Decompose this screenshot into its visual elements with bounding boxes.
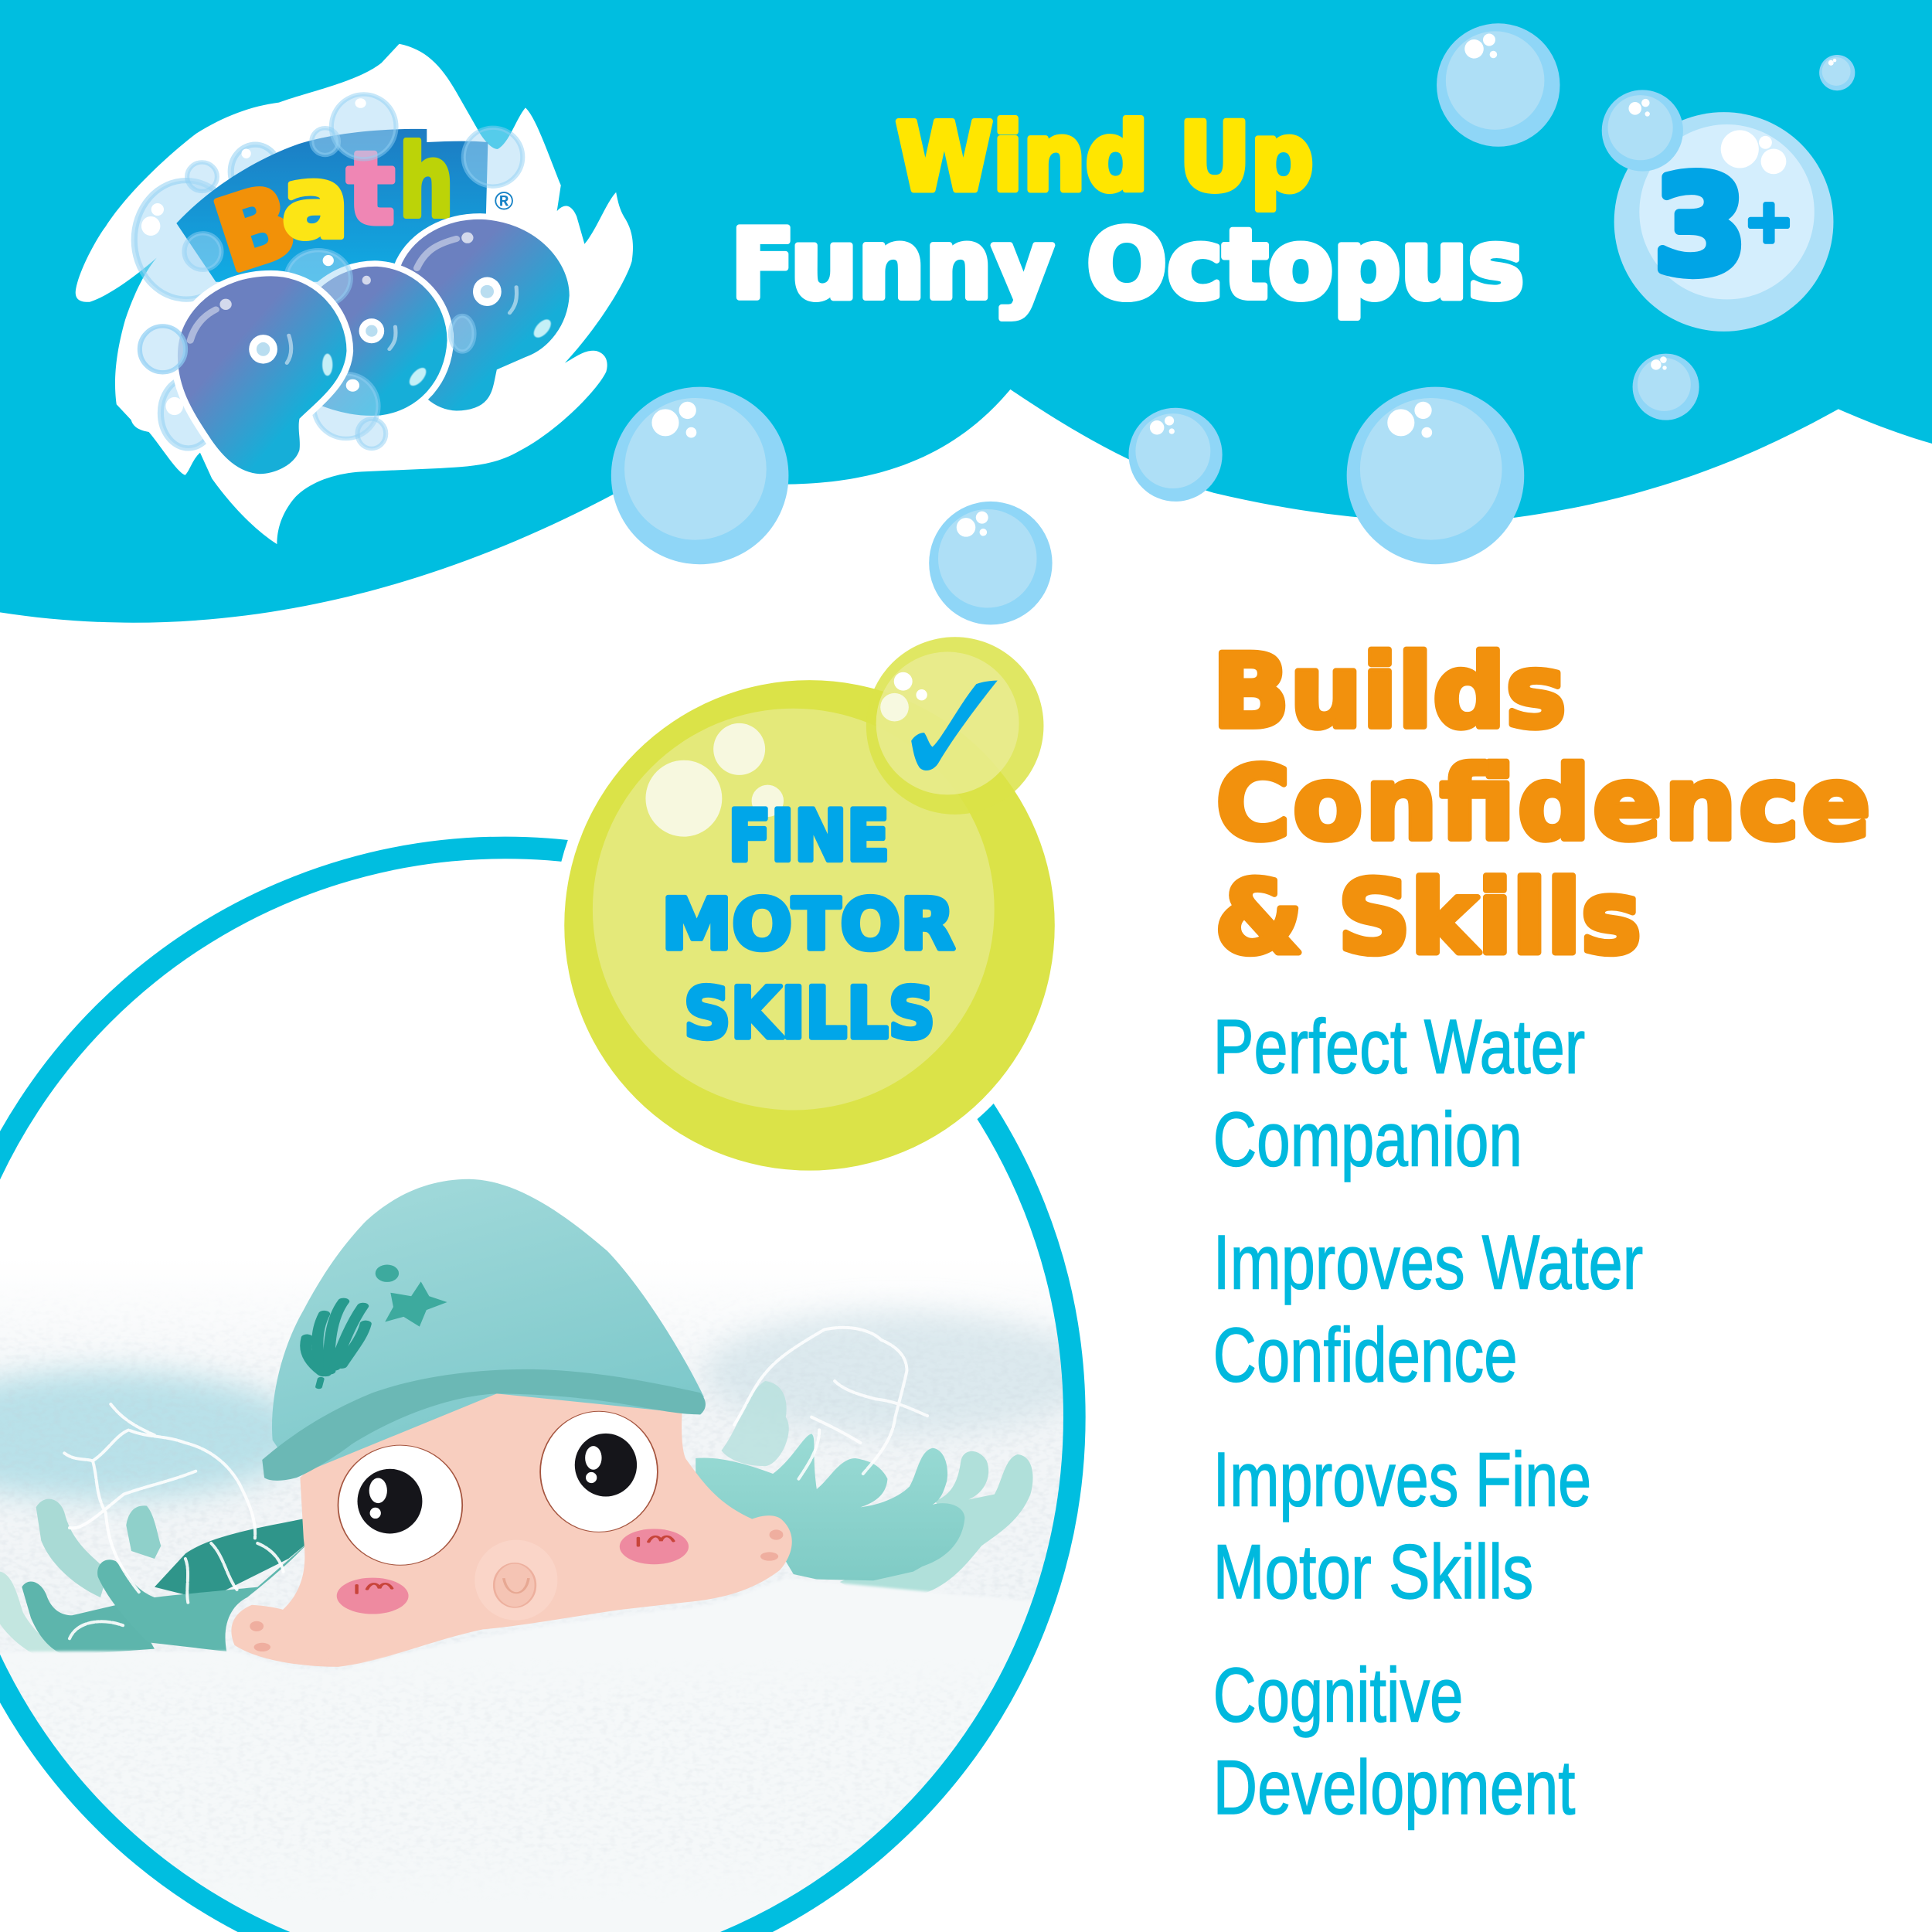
logo word Bath: h — [400, 125, 454, 240]
heading: builds confidence and skills: Builds — [1213, 633, 1566, 750]
soft bubbles in front of banner — [185, 94, 522, 448]
logo splash — [76, 44, 633, 544]
badge label: MOTOR — [662, 885, 955, 966]
fine motor skills badge — [564, 637, 1055, 1171]
badge bubble — [564, 680, 1055, 1171]
bubble — [929, 502, 1053, 624]
foam texture in foreground — [0, 1657, 1109, 1903]
bubble — [1437, 23, 1560, 147]
icon: star decal — [385, 1281, 447, 1327]
mouth — [474, 1540, 557, 1621]
age text: 3 — [1654, 148, 1747, 304]
cheeks — [337, 1529, 689, 1614]
bubble — [1819, 55, 1855, 90]
icon: shell decal — [306, 1301, 366, 1387]
logo banner — [176, 129, 488, 282]
logo word Bath: B — [202, 163, 309, 295]
badge label: SKILLS — [684, 973, 935, 1054]
badge highlights — [645, 723, 784, 837]
benefit: improves water confidence: Confidence — [1213, 1312, 1517, 1397]
benefit: cognitive development: Development — [1213, 1745, 1575, 1830]
logo word Bath: a — [282, 146, 349, 260]
title line two: Funny Octopus — [730, 209, 1524, 321]
body — [231, 1377, 792, 1667]
left tentacles — [0, 1404, 311, 1655]
soft bubbles behind banner — [134, 145, 280, 448]
octopus toy — [0, 1179, 1077, 1932]
right splash — [734, 1328, 927, 1479]
bubble — [1602, 90, 1683, 172]
age badge 3+ — [1614, 112, 1833, 332]
left splash — [64, 1404, 284, 1638]
benefit: perfect water companion: Perfect Water — [1213, 1005, 1585, 1090]
benefit: improves fine motor skills: Improves Fine — [1213, 1437, 1591, 1522]
shell helmet — [262, 1179, 706, 1481]
photo ring — [0, 848, 1074, 1932]
check bubble — [866, 637, 1043, 815]
heading: builds confidence and skills — [1213, 633, 1870, 976]
logo letter P front — [175, 274, 350, 477]
right eye — [540, 1411, 658, 1532]
title — [730, 104, 1524, 321]
badge label — [662, 796, 955, 1054]
logo word Bath — [202, 125, 454, 295]
benefit: improves water confidence: Improves Water — [1213, 1220, 1643, 1305]
bubble — [611, 387, 788, 564]
age badge 3+: + — [1744, 188, 1794, 257]
soft bubble on front letter — [140, 326, 185, 372]
title line one: Wind Up — [896, 104, 1314, 213]
benefit: improves fine motor skills: Motor Skills — [1213, 1529, 1533, 1614]
bubble — [1347, 387, 1524, 564]
benefit: improves water confidence — [1213, 1220, 1643, 1397]
badge label: FINE — [728, 796, 889, 877]
benefit: perfect water companion — [1213, 1005, 1585, 1182]
logo word Bath: t — [347, 133, 394, 247]
header wave — [0, 0, 1932, 623]
white halo around skills badge — [553, 669, 1066, 1182]
front foam over the body — [0, 1578, 1077, 1932]
heading: builds confidence and skills: Confidence — [1216, 745, 1870, 862]
left eye — [338, 1445, 462, 1565]
benefit: cognitive development — [1213, 1652, 1575, 1830]
photo: foam water and octopus toy — [0, 1179, 1109, 1932]
logo letter P middle — [298, 264, 451, 419]
icon: dot decal — [376, 1264, 399, 1282]
logo: Bath Pop — [76, 44, 633, 544]
registered mark: ® — [495, 187, 514, 216]
right tentacles — [696, 1328, 1033, 1597]
foam background — [0, 1294, 1063, 1671]
tentacle tip suckers — [250, 1529, 783, 1651]
benefit: cognitive development: Cognitive — [1213, 1652, 1463, 1737]
benefit: perfect water companion: Companion — [1213, 1097, 1522, 1182]
bubble — [1633, 354, 1699, 420]
benefit: improves fine motor skills — [1213, 1437, 1591, 1614]
bubble — [1128, 408, 1223, 502]
icon: check mark — [911, 681, 998, 770]
logo letter P back — [369, 216, 573, 413]
benefits list — [1213, 1005, 1643, 1830]
heading: builds confidence and skills: & Skills — [1215, 859, 1641, 976]
soft bubble glints — [141, 98, 366, 415]
